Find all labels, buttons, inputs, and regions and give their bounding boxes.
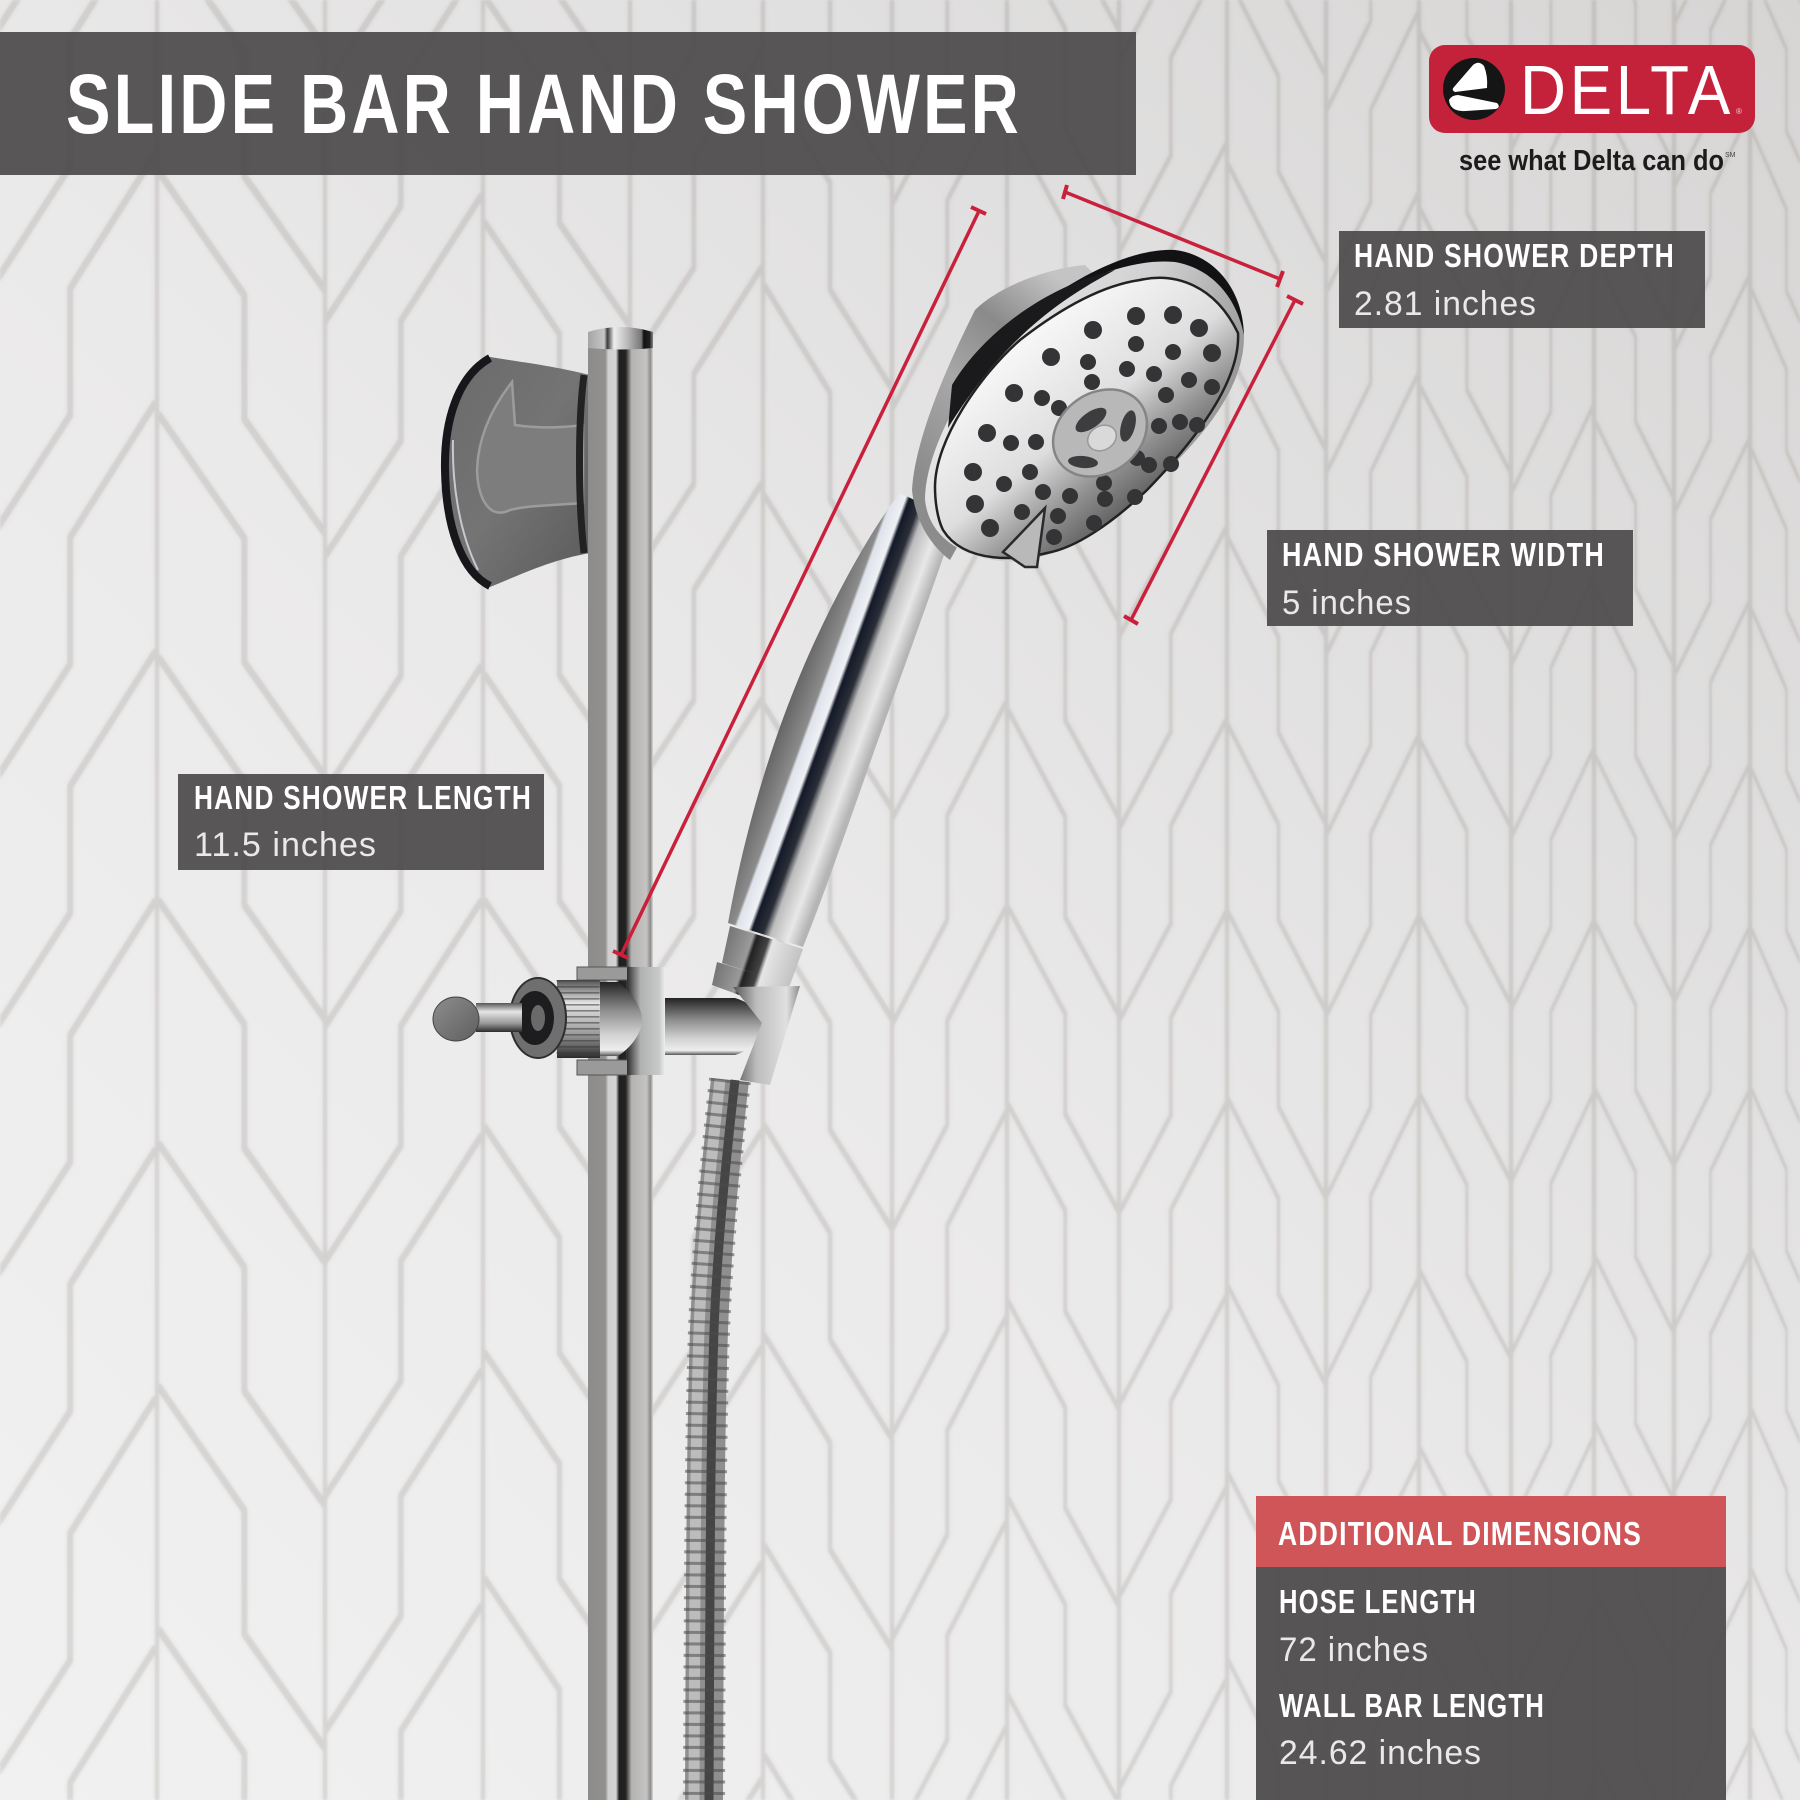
- cone: [595, 982, 642, 1056]
- collar: [510, 978, 566, 1058]
- logo tagline: see what Delta can do: [1459, 145, 1724, 177]
- title banner: [0, 32, 1136, 175]
- wall slide bar: [588, 327, 653, 1800]
- hose: [694, 1080, 735, 1800]
- center block: [627, 967, 665, 1075]
- label: hand shower depth: [1339, 231, 1705, 328]
- panel body: HOSE LENGTH: [1279, 1583, 1477, 1620]
- label: hand shower length: 11.5 inches: [194, 826, 377, 864]
- panel: additional dimensions: [1256, 1496, 1726, 1800]
- label: hand shower depth: HAND SHOWER DEPTH: [1354, 237, 1675, 274]
- center spray disc: [1036, 372, 1164, 494]
- panel body: 24.62 inches: [1279, 1734, 1482, 1772]
- label: hand shower length: HAND SHOWER LENGTH: [194, 779, 532, 816]
- knob disc: [433, 997, 479, 1041]
- swivel arm: [665, 998, 763, 1055]
- label: hand shower length: [178, 774, 544, 870]
- Delta logo: ®: [1736, 107, 1742, 116]
- logo mark: [1443, 58, 1505, 120]
- Delta logo: [1429, 45, 1755, 133]
- label: hand shower width: [1267, 530, 1633, 626]
- knurled nut: [557, 980, 600, 1058]
- nozzles: [964, 306, 1221, 545]
- dimension line: hand shower width: [1124, 296, 1303, 624]
- label: hand shower width: HAND SHOWER WIDTH: [1282, 536, 1605, 573]
- logo tagline: SM: [1725, 152, 1736, 159]
- wall mount bracket: [442, 357, 590, 587]
- hand shower handle: [712, 493, 945, 1010]
- face: [935, 278, 1238, 558]
- swivel holder: [733, 986, 800, 1085]
- dimension line: hand shower depth: [1063, 185, 1283, 287]
- rim dark crescent: [1040, 250, 1244, 335]
- label: hand shower depth: 2.81 inches: [1354, 285, 1537, 323]
- slider clamp and knob: [433, 967, 800, 1085]
- shell dark reflection: [948, 270, 1115, 428]
- label: hand shower width: 5 inches: [1282, 584, 1412, 622]
- clamp flanges: [577, 967, 630, 1075]
- panel body: [1256, 1567, 1726, 1800]
- panel heading: [1256, 1496, 1726, 1567]
- panel heading: ADDITIONAL DIMENSIONS: [1278, 1515, 1642, 1552]
- Delta logo: DELTA: [1520, 51, 1734, 129]
- spray lever: [1003, 508, 1045, 567]
- panel body: WALL BAR LENGTH: [1279, 1687, 1545, 1724]
- dimension line: hand shower length: [613, 207, 986, 958]
- panel body: 72 inches: [1279, 1631, 1429, 1669]
- shell: [912, 265, 1120, 560]
- stem: [476, 1003, 522, 1032]
- rim: [925, 250, 1244, 562]
- shower head: [912, 250, 1244, 567]
- title banner: SLIDE BAR HAND SHOWER: [66, 57, 1022, 151]
